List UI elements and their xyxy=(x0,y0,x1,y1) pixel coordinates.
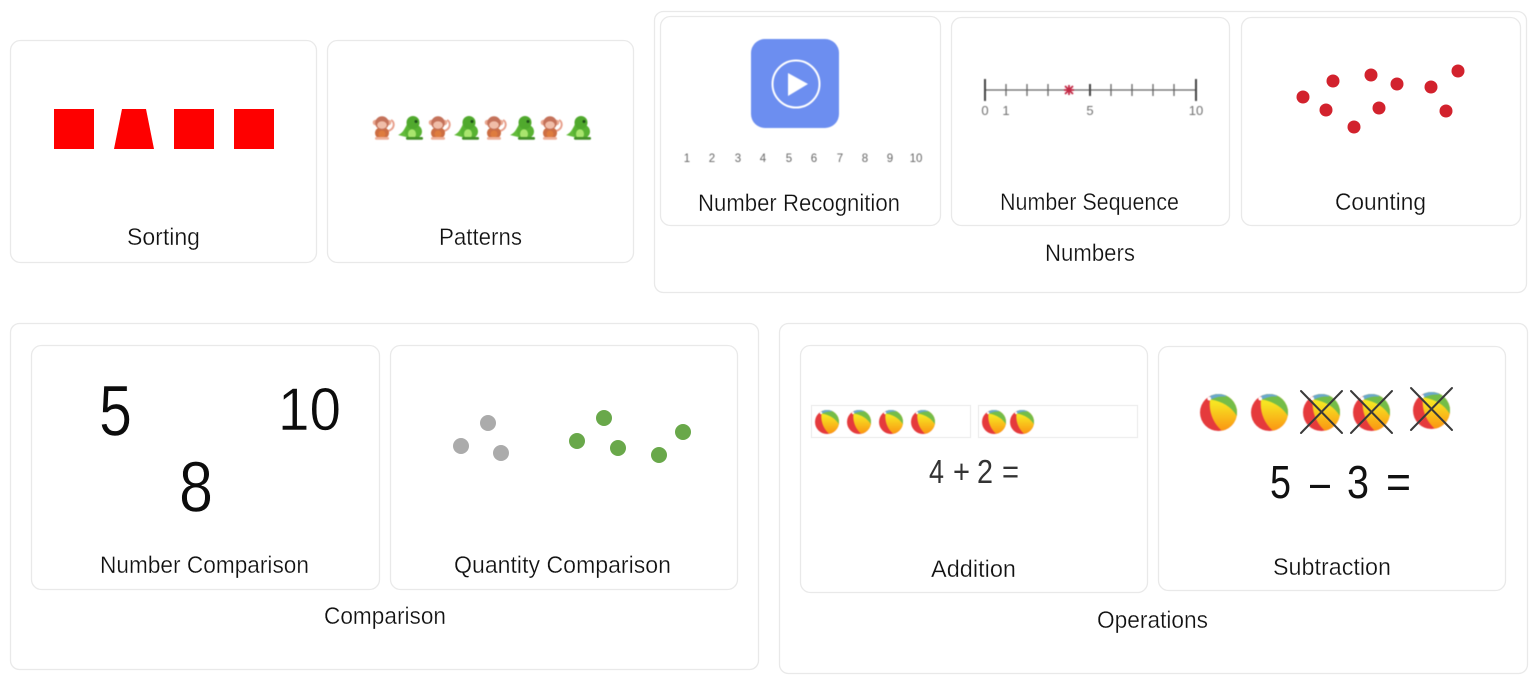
equation: 4 + 2 =: 4 xyxy=(929,453,944,490)
card: subtraction xyxy=(1158,346,1506,590)
card: number sequence xyxy=(952,18,1230,226)
red shapes row xyxy=(54,109,274,149)
equation: 5 - 3 =: – xyxy=(1310,456,1330,508)
large numbers: 10 xyxy=(278,376,341,443)
label: addition: Addition xyxy=(931,556,1016,583)
number row 1 to 10: 9 xyxy=(887,153,893,165)
label: comparison: Comparison xyxy=(324,603,446,630)
label: number sequence: Number Sequence xyxy=(1000,189,1179,216)
card: counting xyxy=(1242,18,1520,226)
label: counting: Counting xyxy=(1335,189,1426,216)
number row 1 to 10: 5 xyxy=(786,153,792,165)
equation: 5 - 3 = xyxy=(1270,456,1411,508)
equation: 5 - 3 =: 3 xyxy=(1347,456,1369,508)
label: sorting: Sorting xyxy=(127,224,200,251)
monkey and dragon pattern xyxy=(373,116,591,140)
icon: play button xyxy=(751,39,839,128)
large numbers: 5 xyxy=(99,372,132,452)
label: operations: Operations xyxy=(1097,607,1208,634)
equation: 5 - 3 =: 5 xyxy=(1270,456,1291,508)
red counting dots xyxy=(1296,64,1464,134)
label: numbers: Numbers xyxy=(1045,240,1135,267)
card: number comparison xyxy=(32,346,380,590)
panel: sorting xyxy=(10,40,316,262)
balls with crosses xyxy=(1200,388,1452,433)
large numbers: 8 xyxy=(179,448,213,528)
number row 1 to 10: 2 xyxy=(709,153,715,165)
card: addition xyxy=(800,346,1148,592)
label: quantity comparison: Quantity Comparison xyxy=(454,552,671,579)
number line: 5 xyxy=(1086,103,1094,118)
label: patterns: Patterns xyxy=(439,224,522,251)
number line: 1 xyxy=(1002,103,1010,118)
green dots xyxy=(569,410,691,463)
number line: 0 xyxy=(981,103,989,118)
card: number recognition xyxy=(660,16,940,226)
number line xyxy=(981,79,1203,118)
number row 1 to 10 xyxy=(684,153,922,165)
panel: patterns xyxy=(328,40,634,262)
ten-frame boxes with balls xyxy=(812,406,1138,438)
number row 1 to 10: 6 xyxy=(811,153,817,165)
number row 1 to 10: 10 xyxy=(910,153,922,165)
number row 1 to 10: 1 xyxy=(684,153,690,165)
label: number recognition: Number Recognition xyxy=(698,190,900,217)
label: subtraction: Subtraction xyxy=(1273,554,1391,581)
panel: operations xyxy=(780,324,1528,674)
equation: 4 + 2 =: = xyxy=(1002,453,1019,490)
number row 1 to 10: 3 xyxy=(735,153,741,165)
grey dots xyxy=(453,415,509,461)
panel: numbers xyxy=(654,12,1526,292)
marker: red star xyxy=(1064,85,1074,95)
equation: 5 - 3 =: = xyxy=(1386,456,1411,508)
label: number comparison: Number Comparison xyxy=(100,552,309,579)
number line: 10 xyxy=(1189,103,1203,118)
number row 1 to 10: 8 xyxy=(862,153,868,165)
large numbers xyxy=(99,372,341,528)
panel: comparison xyxy=(10,324,758,670)
number row 1 to 10: 7 xyxy=(837,153,843,165)
equation: 4 + 2 =: 2 xyxy=(977,453,993,490)
equation: 4 + 2 = xyxy=(929,453,1019,490)
number row 1 to 10: 4 xyxy=(760,153,767,165)
card: quantity comparison xyxy=(390,346,738,590)
equation: 4 + 2 =: + xyxy=(953,453,970,490)
